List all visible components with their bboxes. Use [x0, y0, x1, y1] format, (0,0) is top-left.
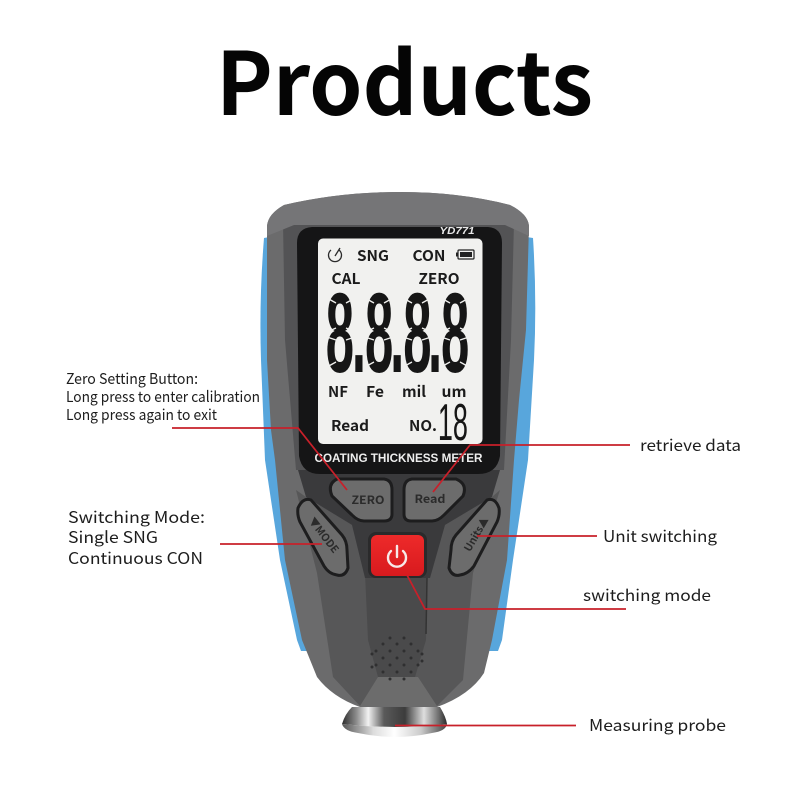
LCD unit labels: Fe [366, 381, 384, 402]
screen bezel [297, 227, 502, 474]
measuring probe tip [342, 707, 447, 737]
speaker grille [370, 636, 424, 680]
callout: unit switching: Unit switching [603, 523, 717, 547]
callout: switching mode power: switching mode [583, 582, 711, 606]
side bands beside the screen [283, 222, 514, 470]
LCD unit labels: NF [328, 381, 348, 402]
meter name label: COATING THICKNESS METER [314, 451, 483, 465]
callout: switching mode SNG CON: Switching Mode: [68, 504, 205, 528]
LCD unit labels: Read [331, 415, 369, 436]
icon: timer [328, 248, 342, 262]
LCD screen [318, 238, 482, 451]
device: coating thickness meter [260, 192, 535, 737]
dark groove around buttons [298, 470, 500, 578]
button: Units [449, 499, 499, 575]
LCD record number: 18 [438, 392, 468, 451]
callout: retrieve data [433, 432, 741, 492]
callout: retrieve data: retrieve data [640, 432, 741, 456]
callout: measuring probe: Measuring probe [589, 712, 726, 736]
title: Products [216, 15, 593, 141]
LCD unit labels [328, 381, 466, 436]
button: Read: Read [414, 491, 446, 507]
LCD status labels: SNG [357, 245, 389, 266]
lower mid panel [296, 490, 500, 706]
callout: switching mode SNG CON [68, 504, 322, 569]
callout: zero setting button [66, 368, 347, 490]
chevron at base [360, 677, 437, 706]
LCD unit labels: mil [402, 381, 426, 402]
callout: switching mode power [407, 575, 711, 609]
button: ZERO [330, 479, 392, 521]
LCD unit labels: um [442, 381, 466, 402]
blue side grips [260, 236, 535, 651]
callout: zero setting button: Zero Setting Button: [66, 368, 198, 389]
LCD status labels [332, 245, 460, 289]
top head highlight [267, 192, 529, 236]
LCD status labels: CON [412, 245, 446, 266]
button: ZERO: ZERO [352, 492, 385, 508]
LCD status labels: ZERO [418, 268, 460, 289]
callout: switching mode SNG CON: Continuous CON [68, 545, 203, 569]
centre lower panel [365, 573, 427, 677]
segment gaps [327, 298, 469, 367]
power button [368, 532, 427, 578]
model label: YD771 [440, 226, 475, 237]
centre panel crease [426, 578, 427, 634]
button: Units: Units▲ [460, 514, 493, 554]
icon: battery [456, 250, 474, 259]
LCD unit labels: NO. [409, 415, 437, 436]
callout: zero setting button: Long press again to exit [66, 404, 217, 425]
callout: switching mode SNG CON: Single SNG [68, 524, 158, 548]
meter body [267, 192, 529, 707]
LCD status labels: CAL [332, 268, 361, 289]
button: MODE: ▼MODE [305, 514, 342, 556]
LCD main reading: 8.8.8.8 [326, 270, 469, 397]
button: Read [404, 479, 464, 521]
button: MODE [298, 499, 348, 575]
callout: zero setting button: Long press to enter calibration [66, 386, 260, 407]
